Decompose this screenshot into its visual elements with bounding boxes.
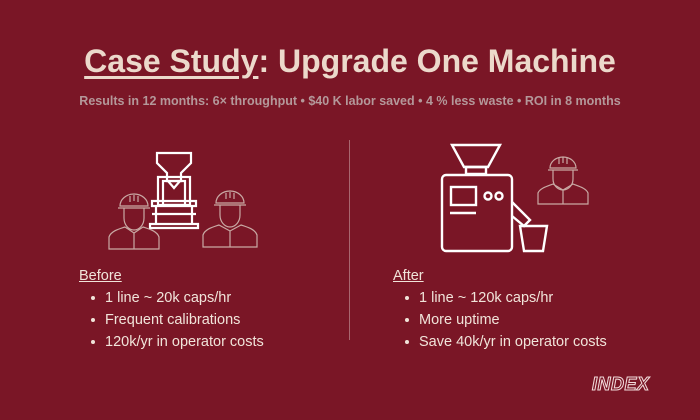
panel: after: After — [393, 268, 424, 284]
icon: before machine and workers — [108, 152, 258, 250]
panel: before: 120k/yr in operator costs — [105, 334, 264, 350]
panel: before: Before — [79, 268, 122, 284]
title: Case Study: Upgrade One Machine — [84, 43, 616, 79]
icon: after machine and worker — [440, 144, 589, 252]
panel: after: 1 line ~ 120k caps/hr — [419, 290, 553, 306]
panel: before: Frequent calibrations — [105, 312, 240, 328]
subtitle: Results in 12 months: 6× throughput • $40 K labor saved • 4 % less waste • ROI in 8 months — [79, 94, 621, 108]
panel: before: 1 line ~ 20k caps/hr — [105, 290, 231, 306]
divider — [349, 140, 350, 340]
panel: before — [79, 268, 264, 350]
panel: after — [393, 268, 607, 350]
panel: after: Save 40k/yr in operator costs — [419, 334, 607, 350]
panel: after: More uptime — [419, 312, 500, 328]
